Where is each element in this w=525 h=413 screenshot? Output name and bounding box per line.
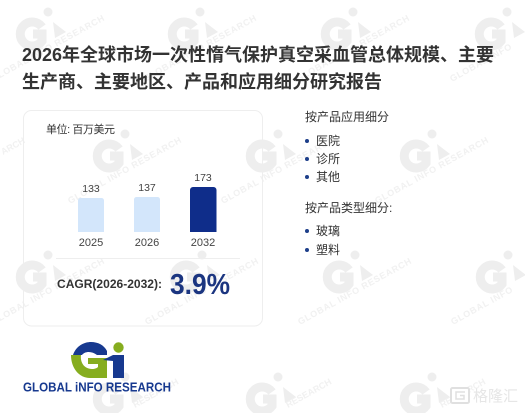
bar 2032: 173 <box>194 172 212 184</box>
logo: Global Info Research: GLOBAL iNFO RESEARCH <box>23 380 171 394</box>
background watermarks: RESEARCH <box>284 377 333 410</box>
background watermarks: GLOBAL INFO RESEARCH <box>141 13 258 84</box>
item: glass: 玻璃 <box>316 224 340 238</box>
bar 2032 <box>190 172 216 249</box>
panel border <box>24 110 262 326</box>
background watermarks: GLOBAL INFO <box>449 284 515 327</box>
item: plastic: 塑料 <box>316 243 340 257</box>
background watermarks: GLOBAL INFO RESEARCH <box>296 256 413 327</box>
item: hospital: 医院 <box>316 134 340 148</box>
background watermarks: GLOBAL INFO RESEARCH <box>66 135 183 206</box>
background watermarks: RESEARCH <box>131 377 180 410</box>
background watermarks: GLOBAL INFO RESEARCH <box>373 135 490 206</box>
background watermarks: GLOBAL INFO <box>448 41 514 84</box>
list: types <box>305 224 340 257</box>
bar 2032: 2032 <box>191 237 215 249</box>
bar 2025: 2025 <box>79 237 103 249</box>
CAGR label: CAGR(2026-2032): <box>57 277 162 291</box>
heading: by application: 按产品应用细分 <box>305 110 389 124</box>
background watermarks: GLOBAL INFO RESEARCH <box>294 13 411 84</box>
bar 2026 <box>134 182 160 249</box>
background watermarks: RESEARCH <box>438 377 487 410</box>
list: applications <box>305 134 340 184</box>
bar 2026: 137 <box>138 182 156 194</box>
item: clinic: 诊所 <box>316 152 340 166</box>
unit label: 单位: 百万美元 <box>46 122 115 136</box>
background watermarks: GLOBAL INFO RESEARCH <box>219 135 336 206</box>
logo: Gelonghui watermark: 格隆汇 <box>473 388 518 405</box>
title: 2026年全球市场一次性惰气保护真空采血管总体规模、主要 <box>22 45 494 65</box>
bar 2025 <box>78 183 104 249</box>
item: other: 其他 <box>316 170 340 184</box>
title <box>22 45 494 92</box>
title: 生产商、主要地区、产品和应用细分研究报告 <box>22 72 382 92</box>
heading: by type: 按产品类型细分: <box>305 201 392 215</box>
CAGR value: 3.9% <box>170 269 230 301</box>
bar 2025: 133 <box>82 183 100 195</box>
background watermarks: GLOBAL INFO RESEARCH <box>143 256 260 327</box>
bar 2026: 2026 <box>135 237 159 249</box>
